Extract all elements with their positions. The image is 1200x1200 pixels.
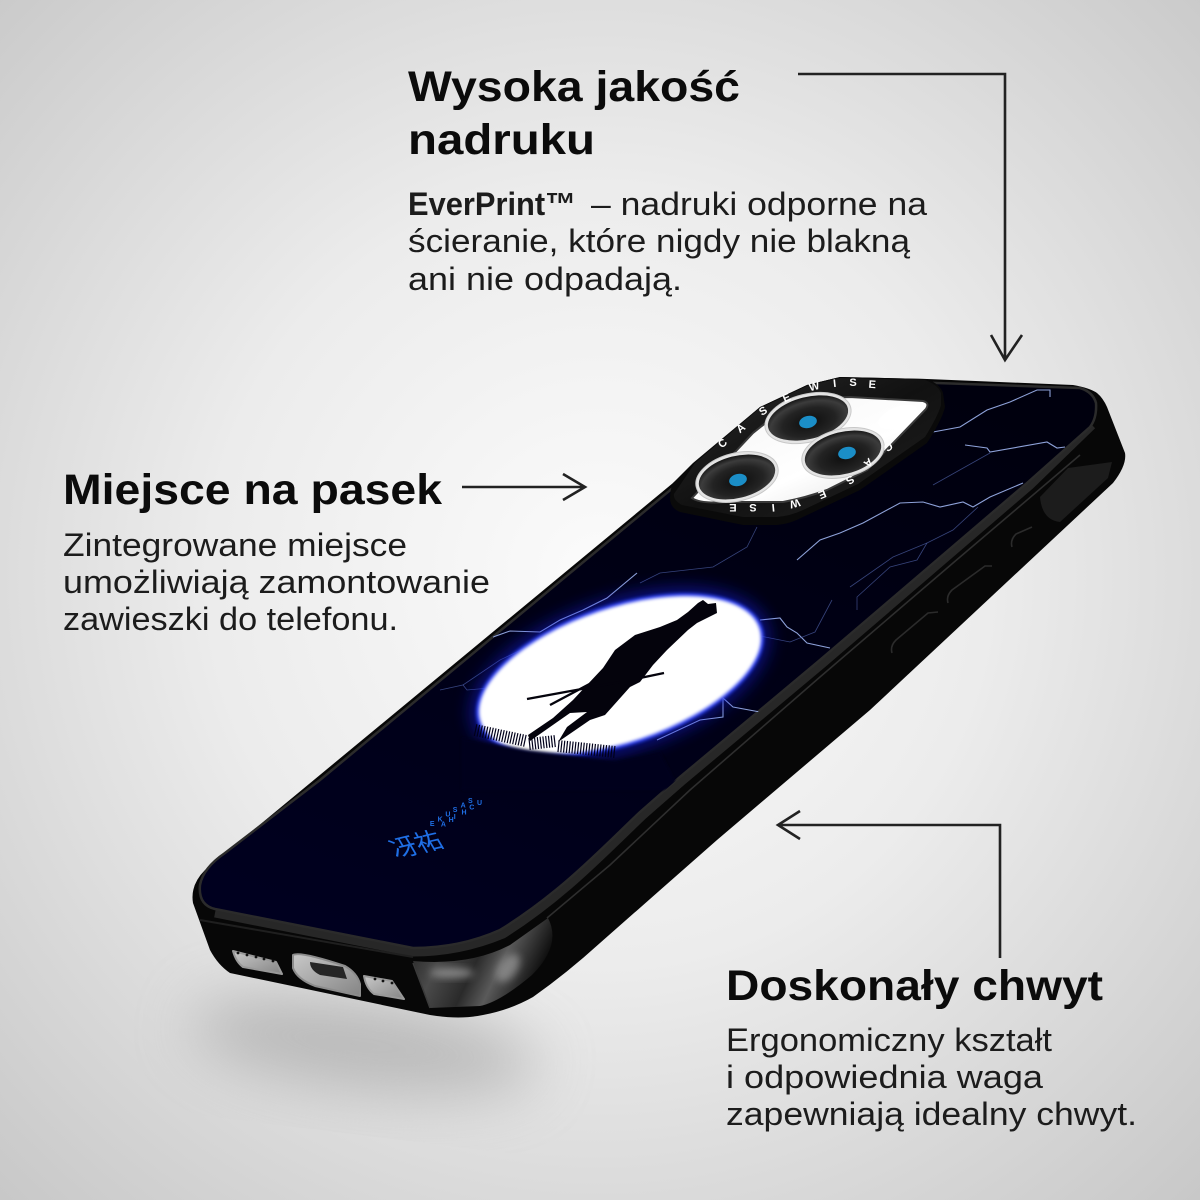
bump ring top xyxy=(674,378,941,517)
body line 1: Ergonomiczny kształt xyxy=(726,1022,1052,1058)
samurai silhouette xyxy=(527,600,717,742)
ring lettering top: S xyxy=(849,377,857,389)
arrow to phone edge xyxy=(778,811,1000,958)
camera bump xyxy=(670,377,945,525)
moon xyxy=(476,593,764,756)
ring lettering bottom: C xyxy=(881,439,895,453)
lens right xyxy=(796,420,890,486)
bottom channel line xyxy=(200,920,413,957)
body line 3: zawieszki do telefonu. xyxy=(63,601,398,637)
ring lettering top: W xyxy=(808,380,821,394)
ring lettering top: E xyxy=(781,391,793,405)
body line 1: – nadruki odporne na xyxy=(591,186,927,222)
body line 1: Zintegrowane miejsce xyxy=(63,527,407,563)
raised bezel band xyxy=(215,425,1092,952)
bottom ports xyxy=(233,951,404,999)
charging port opening xyxy=(310,962,347,979)
heading: Miejsce na pasek xyxy=(63,466,442,514)
phone drop shadow xyxy=(186,979,544,1111)
camera window xyxy=(692,397,927,502)
callout: print quality xyxy=(408,63,1022,360)
ring lettering top xyxy=(716,377,876,451)
callout: grip xyxy=(726,811,1137,1132)
glossy bottom corner xyxy=(413,918,552,1008)
body line 3: ani nie odpadają. xyxy=(408,261,682,297)
ring lettering top: A xyxy=(734,421,748,436)
ring lettering bottom: A xyxy=(861,455,875,469)
ground shade xyxy=(462,738,680,790)
back plate xyxy=(200,380,1096,948)
body line 2: ścieranie, które nigdy nie blakną xyxy=(408,223,910,259)
side grip nub xyxy=(1040,462,1112,522)
moon rim xyxy=(474,590,766,757)
phone case xyxy=(192,377,1125,1018)
back print: moon and lightning xyxy=(385,390,1065,863)
ring lettering bottom: I xyxy=(771,501,775,513)
ring lettering top: I xyxy=(833,378,837,390)
ring lettering top: S xyxy=(757,404,770,418)
arrow to phone side xyxy=(462,474,585,500)
right speaker grille xyxy=(364,976,404,999)
ring lettering bottom: W xyxy=(788,496,801,510)
grass xyxy=(475,730,615,752)
body line 2: umożliwiają zamontowanie xyxy=(63,564,490,600)
body line 2: i odpowiednia waga xyxy=(726,1059,1043,1095)
logo mark: SASUKE xyxy=(427,794,480,832)
heading: Wysoka jakość xyxy=(408,63,740,111)
body bold term: EverPrint™ xyxy=(408,186,576,222)
charging port xyxy=(293,954,360,996)
side channel line xyxy=(547,455,1080,918)
ring lettering bottom: E xyxy=(816,487,828,501)
ring lettering top: E xyxy=(868,379,876,391)
right grille holes xyxy=(374,978,393,984)
logo mark: UCHIHA xyxy=(438,796,489,833)
lens top xyxy=(760,384,856,452)
lens left xyxy=(690,444,784,510)
heading second line: nadruku xyxy=(408,116,595,164)
ring lettering bottom xyxy=(729,439,895,513)
bump wall xyxy=(670,377,945,525)
ring lettering bottom: S xyxy=(749,501,757,513)
moon glow xyxy=(460,576,780,762)
left speaker grille xyxy=(233,951,282,974)
logo mark: 冴祐 xyxy=(385,827,448,863)
side buttons xyxy=(892,527,1032,653)
ring lettering bottom: E xyxy=(729,501,737,513)
lightning bolts xyxy=(440,390,1065,740)
logo mark xyxy=(388,798,482,857)
arrow to phone top xyxy=(798,74,1022,360)
case body xyxy=(192,377,1125,1018)
ring lettering bottom: S xyxy=(843,472,856,486)
callout: strap slot xyxy=(63,466,585,637)
ring lettering top: C xyxy=(716,437,730,451)
heading: Doskonały chwyt xyxy=(726,962,1103,1010)
body line 3: zapewniają idealny chwyt. xyxy=(726,1096,1137,1132)
flash highlight xyxy=(875,400,921,434)
left grille holes xyxy=(237,952,274,962)
